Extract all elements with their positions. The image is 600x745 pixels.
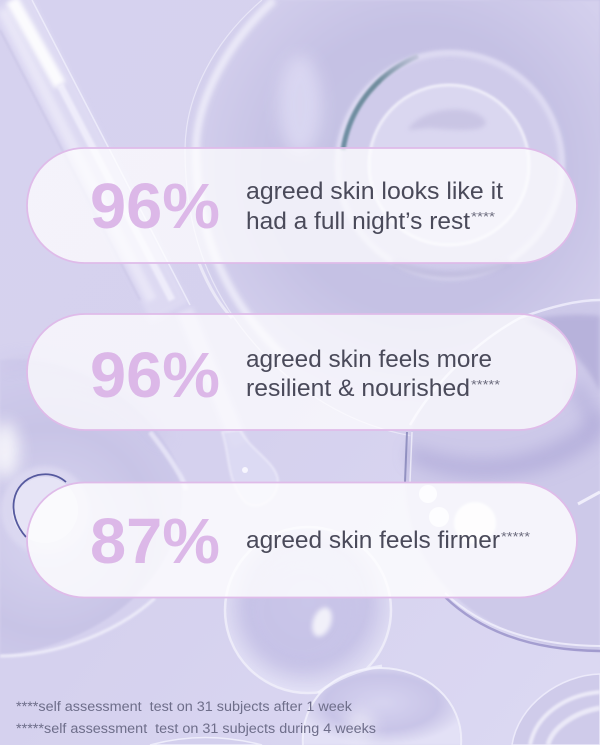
- footnotes: *****self assessment test on 31 subjects during 4 weeks: [16, 721, 376, 736]
- bottom glass bulbs: [225, 527, 461, 745]
- card 2 description: agreed skin feels more: [246, 346, 492, 373]
- card 3 percentage: 87%: [90, 505, 220, 577]
- stat card 1: [27, 148, 577, 263]
- card 2 background pill: [27, 314, 577, 430]
- card 3 description: agreed skin feels firmer: [246, 527, 500, 554]
- card 2 percentage: 96%: [90, 339, 220, 411]
- card 3 background pill: [27, 482, 577, 598]
- footnotes: ****self assessment test on 31 subjects after 1 week: [16, 699, 352, 714]
- card 1 percentage: 96%: [90, 170, 220, 242]
- card 1 background pill: [27, 148, 577, 263]
- stat card 2: [27, 314, 577, 430]
- droplets: [419, 485, 496, 544]
- left petri dish: [0, 359, 186, 656]
- card 1 description: ****: [471, 209, 495, 224]
- bottom corner dishes: [150, 674, 600, 745]
- card 2 description: resilient & nourished: [246, 375, 470, 402]
- right petri dish: [405, 300, 600, 652]
- card 2 description: [246, 346, 500, 402]
- rod bulb tip: [222, 430, 278, 506]
- footnotes: [16, 699, 376, 736]
- large petri dish, top right: [185, 0, 600, 440]
- card 3 description: *****: [501, 529, 530, 544]
- card 1 description: [246, 178, 503, 235]
- card 1 description: had a full night’s rest: [246, 208, 470, 235]
- card 1 description: agreed skin looks like it: [246, 178, 503, 205]
- glass rod, top left: [0, 0, 240, 445]
- stat card 3: [27, 482, 577, 598]
- small dish inside large dish: [335, 50, 565, 280]
- card 2 description: *****: [471, 377, 500, 392]
